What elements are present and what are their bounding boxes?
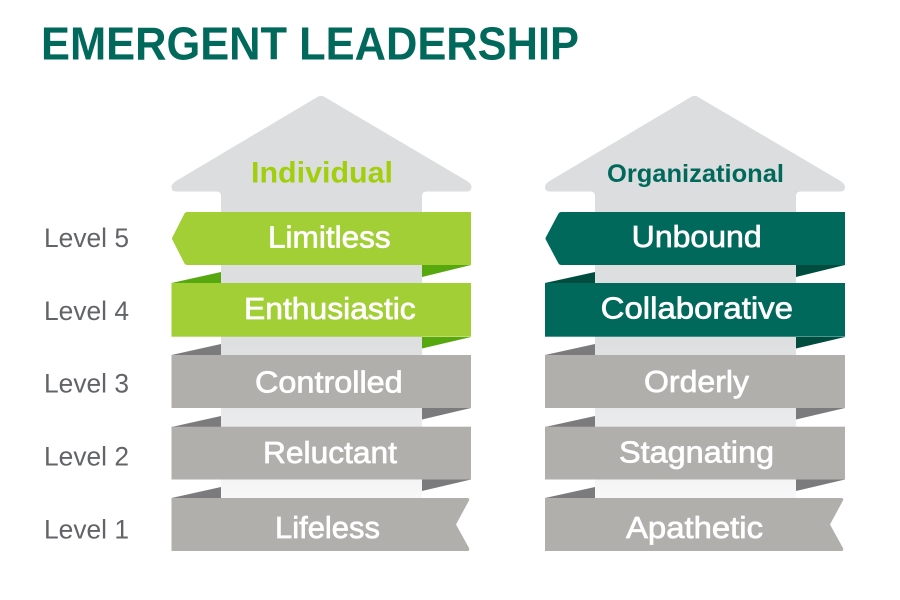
fold: level 2 to 1 [172,480,471,498]
label: level 1: Level 1 [44,514,129,544]
label: level 4: Level 4 [44,296,129,326]
fold: level 3 to 2 [545,408,845,427]
heading: organizational: Organizational [607,160,784,188]
ribbon: apathetic: Apathetic [626,511,763,545]
ribbon: controlled [172,355,471,408]
ribbon: enthusiastic [172,283,471,337]
ribbon: unbound [546,212,845,265]
fold: level 5 to 4 [545,265,845,283]
level labels [44,223,129,544]
fold: level 5 to 4 [172,265,471,283]
ribbon: enthusiastic: Enthusiastic [244,292,416,326]
ribbon: lifeless: Lifeless [275,511,380,545]
ribbon: controlled: Controlled [255,365,403,399]
label: level 3: Level 3 [44,368,129,398]
fold: level 4 to 3 [172,337,471,355]
label: level 2: Level 2 [44,441,129,471]
panel: organizational column [545,96,845,551]
ribbon: reluctant [172,427,471,480]
ribbon: orderly: Orderly [644,365,750,399]
arrow: organizational [545,96,845,498]
fold: level 3 to 2 [172,408,471,427]
fold: level 4 to 3 [545,337,845,355]
panel: individual column [172,96,472,551]
ribbon: reluctant: Reluctant [263,436,398,470]
fold: level 2 to 1 [545,480,845,498]
ribbon: stagnating: Stagnating [619,436,774,470]
ribbon: stagnating [545,427,845,480]
ribbon: limitless: Limitless [268,221,391,255]
ribbon: lifeless [172,498,469,551]
arrow: individual [172,96,472,498]
ribbon: unbound: Unbound [632,220,762,254]
ribbon: orderly [545,355,845,408]
title: EMERGENT LEADERSHIP [41,17,579,69]
ribbon: collaborative [545,283,845,337]
label: level 5: Level 5 [44,223,129,253]
ribbon: collaborative: Collaborative [601,292,793,326]
heading: individual: Individual [251,156,393,189]
ribbon: apathetic [545,498,843,551]
ribbon: limitless [172,212,471,265]
